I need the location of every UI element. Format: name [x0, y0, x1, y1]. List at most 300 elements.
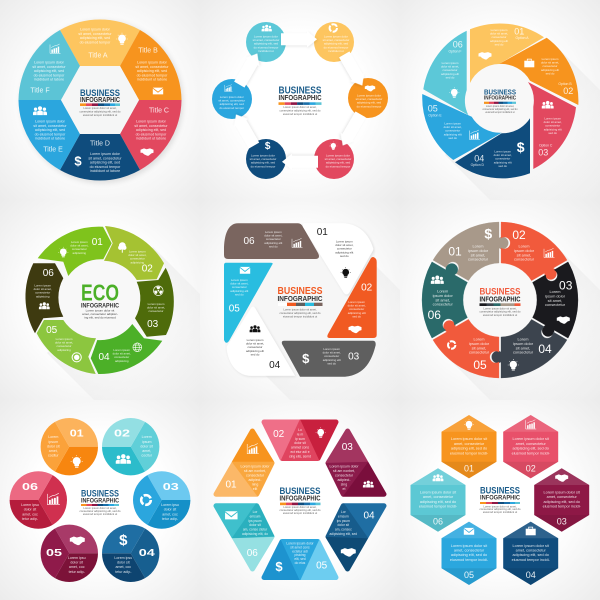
piece labels: sit amet, [435, 297, 450, 302]
segment 06: 06 [453, 39, 463, 49]
piece labels: 06 [428, 308, 441, 322]
segment 04: white: 04 [269, 360, 281, 371]
hexagon 02: Lorem ipsum dolor sit [513, 437, 550, 441]
piece 02: red [483, 203, 572, 298]
segment 03: grey: consectetur [324, 354, 339, 358]
hexagon 03: 03 [557, 517, 567, 527]
piece labels: Lorem [437, 288, 448, 294]
piece labels: Lorem [472, 244, 484, 248]
segment 02: orange: dolor sit amet, [348, 304, 366, 308]
centre heading: BUSINESS [484, 88, 516, 97]
arrow: red to navy [282, 154, 318, 170]
sector: Title D: do eiusmod tempor [90, 165, 121, 169]
centre heading: Lorem ipsum dolor sit amet, [483, 306, 517, 310]
circle 04: amet, coc [116, 565, 131, 569]
centre heading: ECO: ing elit, sed do eiusmod [84, 316, 116, 320]
circle 04: dolor sit [117, 560, 130, 564]
piece 03: et [343, 487, 345, 491]
piece 04: am, consec [335, 528, 352, 532]
circle: orange: adipisicing elit, sed [357, 101, 382, 105]
segment 06: brown: 06 [243, 236, 255, 247]
segment 02: 02 [563, 86, 573, 96]
piece 05: pisicing [294, 553, 306, 557]
sector: Title A: Lorem ipsum dolor [80, 28, 111, 32]
circle: blue: Lorem ipsum dolor [220, 95, 244, 99]
hexagon 06: eiusmod tempor incidi- [419, 505, 458, 509]
hexagon 05: eiusmod tempor incidi- [450, 558, 489, 562]
centre heading: eiusmod tempor incididunt ut [83, 512, 117, 516]
circle: teal: sit amet, consectetur [253, 38, 279, 42]
segment 03: grey: $ [302, 351, 310, 366]
sector: Title F: Lorem ipsum dolor [34, 60, 65, 64]
piece labels: 05 [473, 358, 487, 372]
piece 05: 05 [316, 560, 328, 572]
centre heading: BUSINESS [280, 486, 320, 497]
piece labels: 04 [538, 342, 552, 356]
sector: Title D: incididunt ut labore [90, 169, 120, 173]
segment 06: brown: dolor sit amet, [264, 234, 283, 238]
segment 02: orange: adipisicing elit [348, 311, 366, 315]
segment 04: $ [517, 139, 525, 155]
circle 01: dolor sit [47, 444, 60, 448]
piece 04: Lor [341, 510, 347, 514]
piece 06: adipisicing elit, do [242, 532, 268, 536]
piece 02: Lo [298, 428, 302, 432]
segment 01: white: consectetur [337, 247, 352, 251]
segment 03: dolor sit amet, [147, 306, 165, 310]
sector: Title E: do eiusmod tempor [35, 132, 66, 136]
circle 02: 02 [114, 429, 131, 440]
segment 01: adipisicing elit [490, 39, 508, 43]
piece labels: 02 [512, 228, 526, 242]
centre heading [480, 286, 521, 317]
circle 03: dolor sit [164, 508, 176, 512]
segment 05: Lorem ipsum [56, 337, 73, 341]
circle 01 [41, 418, 98, 475]
segment 06: dolor sit amet, [34, 287, 52, 291]
segment 03 [528, 82, 576, 169]
circle 05: Lorem ipsu [68, 556, 86, 560]
segment 03: Option C [539, 144, 553, 148]
panel 9: six hexagons [410, 415, 589, 585]
piece 05 [262, 539, 338, 580]
piece 05: elit, sed [294, 557, 306, 561]
sector: Title D: Lorem ipsum dolor [90, 152, 121, 156]
segment 01: consectetur [72, 247, 87, 251]
segment 05: blue: Lorem ipsum [231, 278, 248, 282]
circle: teal: incididunt ut [258, 49, 274, 53]
piece 03: 03 [342, 442, 353, 453]
segment 02: Option B [558, 82, 572, 86]
sector: Title E: sit amet, consectetur [33, 124, 67, 128]
piece labels: Lorem [473, 336, 485, 342]
piece 06: Lor [253, 510, 258, 514]
piece 04: emsum [338, 514, 349, 518]
piece 02: ammet cons [291, 446, 309, 450]
circle 06: amet, coc [22, 512, 38, 516]
circle: orange: Lorem ipsum dolor [357, 94, 381, 98]
segment 04: Option D [471, 163, 485, 167]
circle: navy: adipisicing elit, sed [251, 161, 276, 165]
circle 02: ipsum [142, 440, 151, 444]
centre heading: consectetur adipisicing elit, sed do [280, 108, 321, 112]
circle: orange: do eiusmod tempor [357, 104, 381, 108]
circle: red: adipisicing elit, sed [326, 161, 351, 165]
segment 02: dolor sit amet, [128, 253, 147, 257]
segment 04: consectetur [114, 355, 129, 359]
hexagon 06: adipiscing elit, sed do [420, 500, 456, 504]
segment 06: adipisicing [36, 294, 50, 298]
segment 04: dolor sit amet, [494, 153, 512, 157]
panel 6: puzzle ring [399, 203, 600, 400]
segment 01: 01 [92, 237, 103, 248]
centre heading: consectetur adipisicing elit, sed do [480, 507, 521, 511]
segment 04 [455, 118, 530, 178]
segment 03: sed do [548, 131, 557, 135]
sector: Title B: Lorem ipsum dolor [137, 60, 168, 64]
centre heading: INFOGRAPHIC [480, 494, 520, 502]
segment 01: white: dolor sit amet, [335, 243, 354, 247]
segment 04: white: adipisicing elit [246, 349, 264, 353]
segment 05: sed do [448, 136, 457, 140]
sector: Title D: $ [74, 154, 82, 168]
piece 05: Lorem ipsum dolor [286, 542, 315, 546]
piece 02 [262, 420, 338, 461]
centre heading [483, 88, 518, 114]
segment 05: blue: dolor sit amet, [230, 282, 249, 286]
panel 5: rounded square shutter [224, 223, 400, 400]
circle 04: Lorem ipsu [114, 556, 132, 560]
circle: yellow: do eiusmod tempor [324, 45, 348, 49]
centre heading: Lorem ipsum dolor sit amet, [486, 105, 515, 108]
piece labels: sit amet, [548, 298, 562, 303]
piece 04 [326, 503, 386, 572]
centre heading: Lorem ipsum dolor sit amet, [83, 506, 117, 510]
segment 05: consectetur [57, 344, 72, 348]
piece 04: slate [492, 319, 567, 378]
centre heading: Lorem ipsum dolor sit amet, [283, 105, 317, 109]
piece 03 [326, 428, 386, 497]
centre heading [80, 88, 121, 117]
piece 06: teal [399, 254, 487, 348]
piece labels: 01 [448, 245, 462, 259]
sector: Title E [18, 100, 80, 170]
segment 05 [422, 94, 502, 160]
arrow: yellow to orange [337, 50, 369, 90]
piece 03: adipieci- [337, 478, 351, 482]
centre heading: eiusmod tempor incididunt ut [83, 113, 117, 117]
circle 06: tetur adip- [22, 517, 39, 521]
segment 05: Option E [428, 114, 442, 118]
circle: yellow: adipisicing elit, sed [324, 42, 349, 46]
hexagon 06: Lorem ipsum dolor sit [420, 490, 457, 494]
segment 02 [499, 38, 578, 105]
hexagon 02: amet, consectetur [516, 442, 547, 446]
hexagon 04: eiusmod tempor incidi- [512, 558, 551, 562]
piece 05: $ [275, 559, 283, 574]
segment 06: Lorem ipsum [442, 61, 459, 65]
segment 05: 05 [46, 325, 58, 336]
segment 05: Lorem ipsum [444, 122, 462, 126]
centre heading: eiusmod tempor incididunt ut [483, 510, 517, 514]
segment 05: adipisicing elit [444, 132, 462, 136]
circle 06: 06 [22, 482, 39, 493]
centre heading: ECO: Lorem ipsum dolor sit [86, 308, 114, 312]
segment 05: adipisicing [57, 348, 71, 352]
arrow: blue to teal [232, 49, 264, 89]
segment 04: white [227, 306, 295, 376]
centre heading [278, 86, 322, 116]
piece 06: ips psum [248, 519, 262, 523]
piece 02: 02 [273, 429, 285, 440]
segment 06: 06 [43, 268, 54, 279]
circle 06: dolor sit [24, 508, 36, 512]
piece 02: ect etur adi e [290, 450, 310, 454]
circle: blue: sit amet, consectetur [218, 99, 245, 103]
circle 03: amet, coc [162, 512, 178, 516]
sector: Title B: do eiusmod tempor [137, 73, 168, 77]
segment 06 [25, 263, 63, 333]
sector: Title C: sit amet, consectetur [134, 124, 168, 128]
panel 1: hexagon-centred circle with titles [18, 20, 183, 183]
circle: orange: sit amet, consectetur [356, 97, 382, 101]
sector: Title B [120, 30, 182, 100]
circle: teal: Lorem ipsum dolor [254, 34, 278, 38]
piece 03: black [513, 252, 600, 346]
sector: Title E: Title E [43, 146, 63, 154]
segment 04: adipisicing elit [494, 160, 512, 164]
piece labels: ipsum dolor [545, 293, 566, 298]
segment 03: grey: sed do [327, 361, 336, 365]
circle 06: Lorem ipsu [21, 503, 39, 507]
piece labels: ipsum dolor [513, 341, 534, 346]
centre heading: BUSINESS [480, 486, 520, 496]
piece labels: consectetur [545, 302, 566, 307]
segment 02: Lorem ipsum [542, 57, 559, 61]
piece 01: Lorem ipsum dolor [241, 464, 270, 468]
circle: teal: adipisicing elit, sed [254, 42, 279, 46]
piece 06: emsum [250, 514, 261, 518]
segment 03 [135, 268, 174, 337]
hexagon 04: Lorem ipsum dolor sit [513, 544, 550, 548]
panel 3: pinwheel circle with options [422, 23, 600, 200]
centre heading: eiusmod tempor incididunt ut [483, 313, 517, 317]
piece labels: ipsum dolor [469, 341, 490, 346]
segment 01: white: 01 [317, 227, 328, 238]
segment 02: Lorem ipsum [129, 250, 146, 254]
hexagon 03: Lorem ipsum dolor sit [544, 490, 581, 494]
piece 01: ning [252, 482, 258, 486]
segment 05: blue: adipisicing elit [230, 289, 248, 293]
segment 05: dolor sit amet, [444, 125, 462, 129]
centre heading [80, 488, 121, 516]
sector: Title C [120, 100, 182, 170]
arrow: teal to yellow [281, 31, 317, 47]
centre heading: BUSINESS [80, 88, 120, 99]
segment 04: adipisicing [115, 359, 129, 363]
segment 05: blue: consectetur [232, 285, 247, 289]
hexagon 04: amet, consectetur [516, 548, 547, 552]
hexagon 06: amet, consectetur [423, 495, 454, 499]
segment 05: blue [224, 263, 273, 343]
piece 04: adipisicing elit, sed [329, 532, 357, 536]
circle: teal: do eiusmod tempor [254, 45, 278, 49]
circle: blue [212, 79, 252, 119]
segment 05: blue: sed do [235, 292, 244, 296]
segment 03: grey: dolor sit amet, [323, 351, 341, 355]
piece labels: ipsum dolor [433, 293, 453, 298]
piece labels: sit amet, [517, 252, 531, 257]
circle: red [314, 139, 354, 179]
centre heading: ECO: ECO [81, 279, 119, 305]
circle 03 [133, 471, 190, 529]
sector: Title A: do eiusmod tempor [80, 40, 111, 44]
hexagon 02: 02 [526, 463, 536, 473]
hexagon 05 [442, 522, 496, 585]
hexagon 05: amet, consectetur [454, 548, 485, 552]
circle 01: cocitur [48, 454, 59, 458]
hexagon 05: adipiscing elit, sed do [451, 553, 487, 557]
arrow: navy to blue [229, 110, 261, 150]
sector: Title F: Title F [30, 88, 50, 94]
segment 02: orange: sed do [352, 314, 361, 318]
piece labels: Lorem [549, 289, 561, 294]
piece 01: tan [433, 222, 508, 281]
segment 02: dolor sit amet, [541, 61, 559, 65]
circle 06 [10, 471, 67, 529]
sector: Title B: sit amet, consectetur [135, 65, 169, 69]
segment 02: consectetur [543, 64, 558, 68]
sector: Title F: do eiusmod tempor [34, 73, 65, 77]
segment 06: Lorem ipsum [34, 284, 52, 288]
centre heading [280, 486, 321, 515]
piece 05: sit amet cons [290, 545, 310, 549]
circle: navy: Lorem ipsum dolor [251, 154, 275, 158]
piece 05: ectetur adi [292, 549, 308, 553]
piece labels: consectetur [514, 257, 535, 262]
circle 05: tetur adip- [69, 570, 86, 574]
segment 01: dolor sit amet, [70, 244, 89, 248]
piece labels: consectetur [469, 350, 490, 355]
piece 03: sit am nonbet, [333, 469, 355, 473]
piece 06: am, conse ctetur [243, 528, 268, 532]
hexagon 03: amet, consectetur [547, 495, 578, 499]
segment 01: Lorem ipsum [71, 240, 88, 244]
sector: Title B: incididunt ut labore [137, 78, 167, 82]
circle 05 [41, 525, 98, 582]
hexagon 05: Lorem ipsum dolor sit [451, 544, 488, 548]
circle 01: ipsum [49, 440, 58, 444]
segment 03: grey: adipisicing elit [323, 358, 341, 362]
centre heading [480, 486, 521, 514]
centre heading: consectetur adipisicing elit, sed do [280, 508, 321, 512]
hexagon 01: eiusmod tempor incidi- [450, 451, 489, 455]
centre heading: INFOGRAPHIC [280, 495, 320, 502]
sector: Title D: sit amet, consectetur [88, 156, 122, 160]
piece labels: consectetur [468, 257, 489, 262]
segment 06: brown: sed do [269, 244, 278, 248]
piece labels: consectetur [513, 350, 534, 355]
centre heading: Lorem ipsum dolor sit amet, [283, 308, 317, 312]
piece 04: ips psum [337, 519, 350, 523]
segment 03: Lorem ipsum [148, 302, 165, 306]
centre heading: BUSINESS [480, 286, 520, 298]
centre heading: consectetur adipisicing elit, sed do [80, 109, 121, 113]
segment 01: Option A [515, 36, 529, 40]
sector: Title D: Title D [90, 140, 110, 148]
segment 04: consectetur [495, 157, 510, 161]
segment 02: adipisicing [131, 260, 144, 264]
segment 01: adipisicing [73, 251, 86, 255]
hexagon 03 [534, 468, 589, 532]
circle: red: sit amet, consectetur [325, 157, 351, 161]
piece 06: dolor sit [249, 523, 261, 527]
segment 01: 01 [514, 27, 524, 37]
piece 02: dolor sit [294, 441, 306, 445]
piece 03: Lorem ipsum dolor [330, 464, 359, 468]
segment 06: consectetur [35, 291, 50, 295]
segment 01: Lorem ipsum [491, 28, 508, 32]
hexagon 01: Lorem ipsum dolor sit [451, 437, 488, 441]
segment 04: white: consectetur [248, 345, 263, 349]
panel 2: six circles linked by arrows [212, 22, 388, 179]
centre heading: ECO [81, 279, 120, 320]
sector: Title A: Title A [88, 52, 108, 60]
centre heading: INFOGRAPHIC [80, 97, 120, 104]
segment 01: consectetur [492, 35, 507, 39]
centre heading: consectetur adipisicing elit, sed do [280, 311, 321, 315]
circle 01: amet, [49, 449, 58, 453]
circle 02: dolor sit [140, 444, 153, 448]
segment 02: consectetur [130, 257, 145, 261]
segment 04: sed do [498, 164, 507, 168]
segment 06: Option F [448, 50, 462, 54]
piece 01 [214, 428, 274, 497]
panel 4: ECO ring of arrow segments [25, 226, 200, 400]
segment 05 [37, 320, 96, 374]
segment 04: white: Lorem ipsum [247, 338, 264, 342]
centre heading: INFOGRAPHIC [278, 95, 322, 102]
centre heading: INFOGRAPHIC [484, 95, 516, 101]
piece 01: 01 [225, 480, 237, 490]
piece 06 [214, 503, 274, 572]
piece 04: 04 [363, 510, 375, 522]
segment 04 [91, 324, 162, 374]
circle 02: amet, [142, 449, 151, 453]
segment 02: orange: Lorem ipsum [348, 300, 366, 304]
centre heading: eiusmod tempor incididunt ut [283, 314, 317, 318]
panel 8: six rounded hexagonal-ring pieces [214, 420, 386, 580]
piece 03: sing [341, 482, 347, 486]
piece 03: consectetur [335, 474, 354, 478]
circle 01: Lorem [48, 435, 58, 439]
segment 01: white: sed do [340, 254, 349, 258]
piece labels: Lorem [517, 336, 529, 342]
hexagon 06: 06 [433, 517, 443, 527]
sector: Title A: sit amet, consectetur [78, 32, 112, 36]
circle: navy: do eiusmod tempor [251, 164, 275, 168]
piece 04: dolor sit [338, 523, 349, 527]
segment 04: 04 [474, 153, 484, 163]
centre heading: BUSINESS [278, 86, 322, 96]
centre heading: Lorem ipsum dolor sit amet, [483, 504, 517, 508]
sector: Title F: incididunt ut labore [34, 78, 64, 82]
hexagon 04: 04 [526, 570, 536, 580]
piece labels: ipsum dolor [468, 248, 489, 253]
piece labels: ipsum dolor [514, 248, 535, 253]
hexagon 01: 01 [464, 463, 474, 473]
segment 02 [104, 226, 164, 280]
